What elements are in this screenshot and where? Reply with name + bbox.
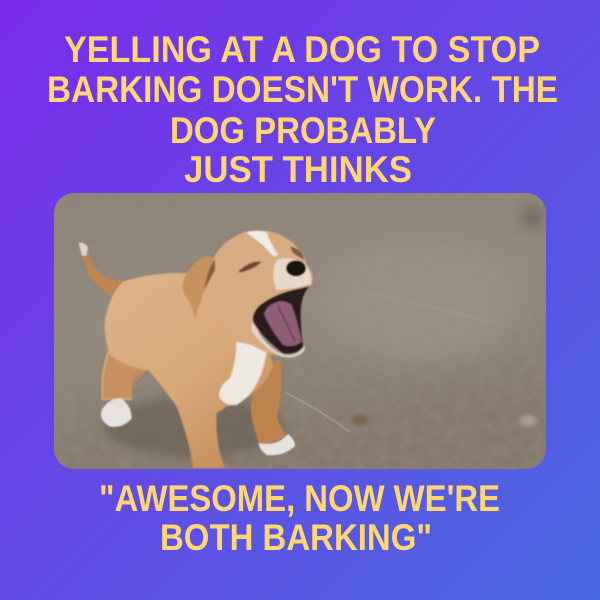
blaze bbox=[246, 231, 278, 257]
shadow bbox=[103, 397, 283, 457]
far ear bbox=[290, 247, 304, 260]
ground bbox=[54, 193, 550, 469]
muzzle bbox=[273, 258, 311, 290]
head bbox=[206, 230, 313, 357]
far front leg bbox=[251, 360, 287, 447]
front paw bbox=[258, 434, 295, 455]
tongue bbox=[264, 301, 302, 346]
mouth bbox=[253, 286, 309, 354]
ear bbox=[183, 256, 215, 318]
chest white bbox=[219, 342, 267, 405]
tail bbox=[82, 250, 125, 296]
nose bbox=[286, 260, 306, 276]
caption: BOTH BARKING" bbox=[160, 517, 432, 558]
heading: YELLING AT A DOG TO STOP bbox=[64, 29, 540, 70]
puppy bbox=[79, 230, 313, 468]
heading: JUST THINKS bbox=[184, 149, 412, 190]
hind leg shade bbox=[103, 353, 147, 398]
back paw bbox=[101, 398, 132, 427]
body bbox=[101, 273, 273, 468]
photo: yawning puppy bbox=[54, 193, 550, 469]
heading: BARKING DOESN'T WORK. THE bbox=[47, 69, 558, 110]
heading bbox=[47, 29, 558, 190]
caption: "AWESOME, NOW WE'RE bbox=[99, 478, 500, 519]
lower lip bbox=[251, 322, 305, 357]
heading: DOG PROBABLY bbox=[170, 110, 436, 151]
closed eye bbox=[238, 261, 262, 273]
caption bbox=[99, 478, 500, 558]
